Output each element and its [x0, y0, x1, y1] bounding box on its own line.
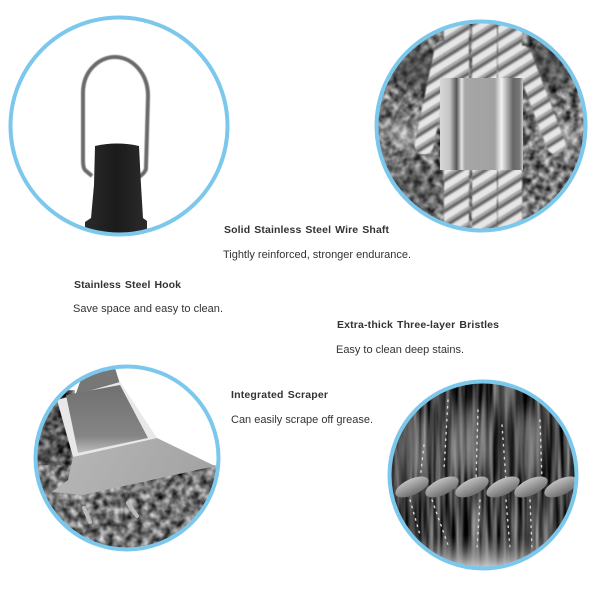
blue ring: shaft	[376, 22, 586, 230]
scraper neck	[57, 382, 157, 457]
text block: bristles: Easy to clean deep stains.	[336, 344, 464, 356]
bristle shading	[385, 41, 580, 207]
bristle texture	[375, 20, 587, 232]
text block: scraper: Can easily scrape off grease.	[231, 414, 373, 426]
dark bristles bottom	[38, 465, 216, 548]
text block: scraper: Integrated Scraper	[231, 389, 328, 401]
panel: integrated scraper photo	[30, 360, 225, 555]
scraper inner panel	[66, 385, 148, 453]
text block: wire shaft: Solid Stainless Steel Wire Shaft	[224, 224, 390, 236]
blue ring: bristles	[390, 382, 576, 568]
text block: bristles	[336, 319, 499, 356]
scraper blade	[52, 438, 215, 495]
blue ring: scraper	[36, 366, 218, 550]
white upper right cover	[120, 360, 225, 466]
top shaft	[76, 369, 120, 394]
twisted wire segments	[395, 476, 574, 498]
lighter bristle tufts	[401, 406, 546, 477]
panel: three-layer bristles photo	[388, 380, 581, 571]
bottom fade	[418, 538, 544, 566]
sparkles on bristles	[410, 400, 542, 550]
text block: wire shaft	[223, 224, 411, 261]
steel sleeve	[440, 78, 523, 170]
icon: black handle cap	[85, 144, 147, 240]
text block: scraper	[231, 389, 373, 426]
panel: wire shaft photo	[375, 15, 587, 235]
rivets	[84, 503, 137, 522]
icon: metal hook loop	[83, 57, 148, 177]
text block: hook: Save space and easy to clean.	[73, 303, 223, 315]
dark bristles left	[38, 390, 75, 466]
text block: bristles: Extra-thick Three-layer Bristles	[337, 319, 499, 331]
blue ring: hook	[10, 18, 228, 234]
text block: wire shaft: Tightly reinforced, stronger endurance.	[223, 249, 411, 261]
text block: hook	[73, 279, 223, 315]
bristle texture	[388, 380, 578, 570]
text block: hook: Stainless Steel Hook	[74, 279, 181, 291]
main ropes	[444, 15, 522, 235]
panel: stainless steel hook photo	[10, 18, 228, 240]
side ropes	[424, 50, 556, 145]
